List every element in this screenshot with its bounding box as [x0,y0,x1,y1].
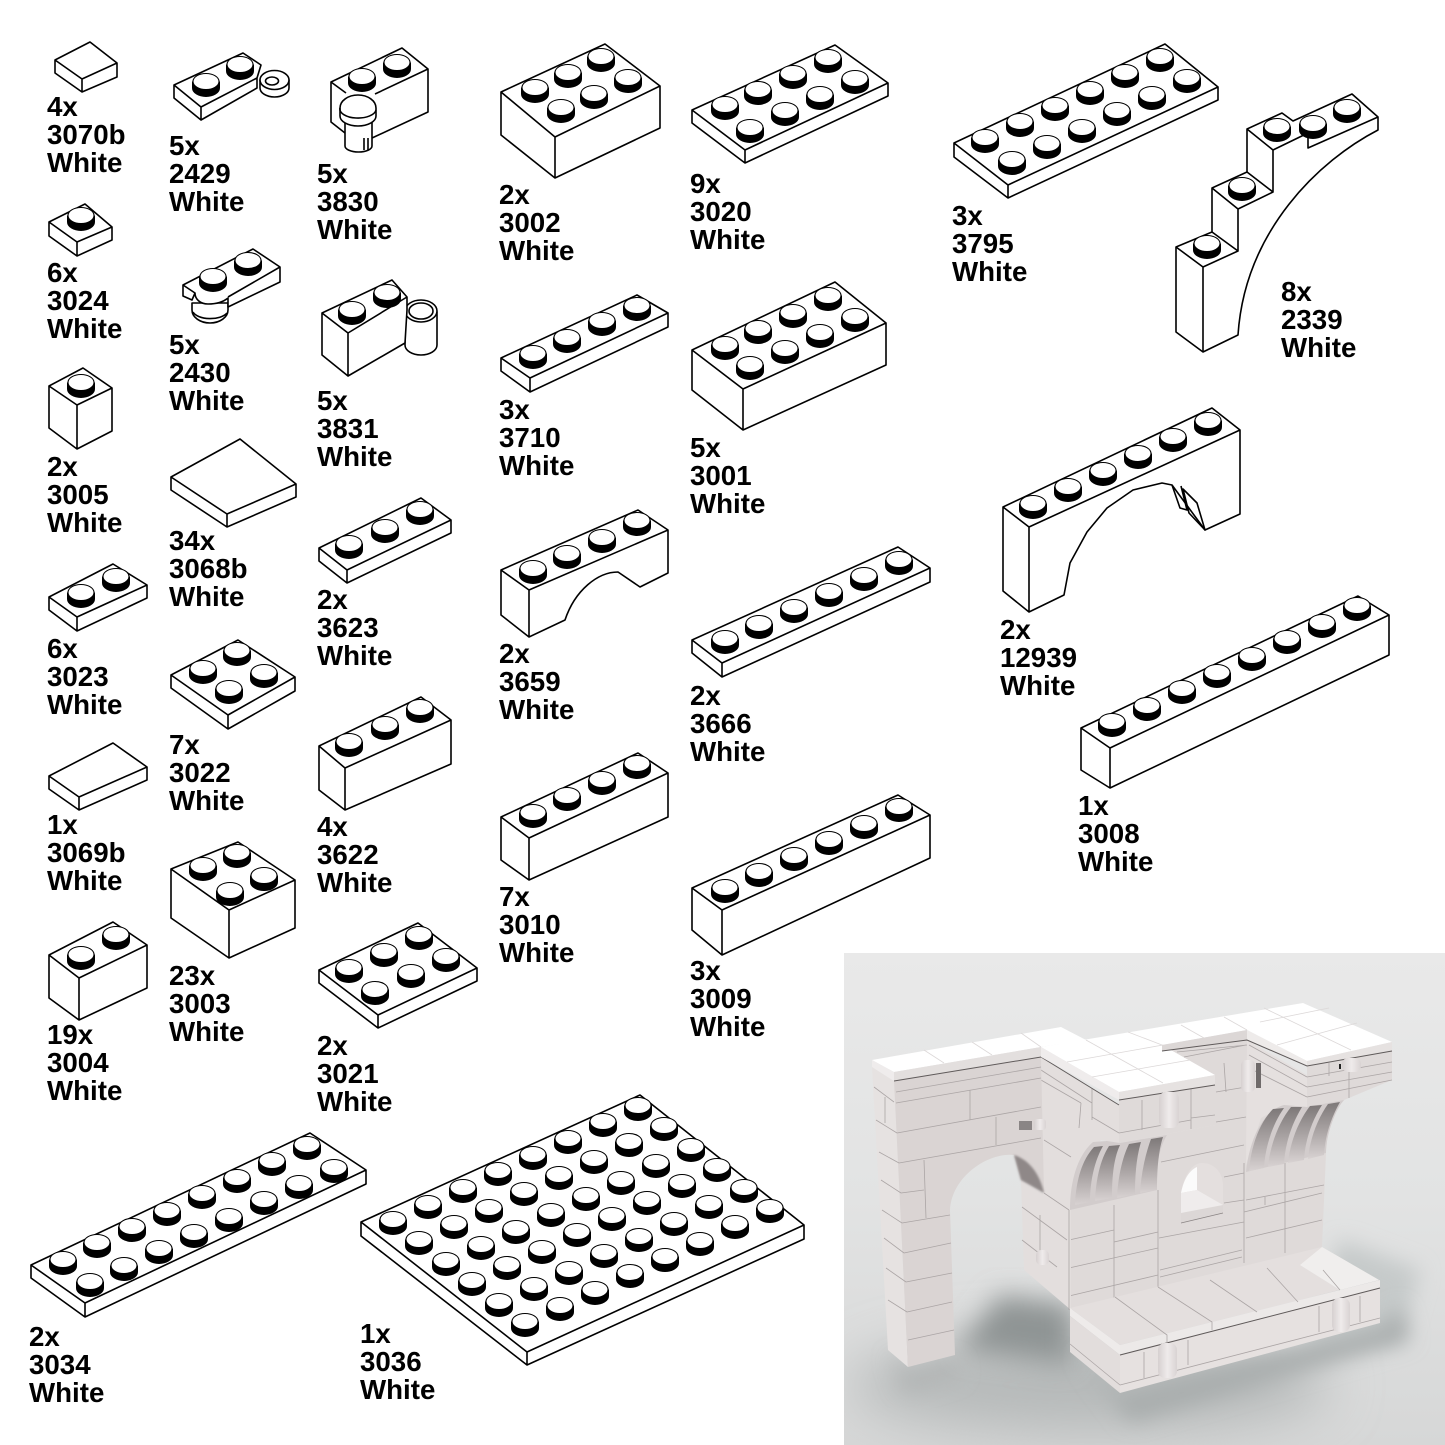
label 3666: 3666 [690,708,752,739]
label 3022: 3022 [169,757,231,788]
label 3024: 6x [47,257,78,288]
label 3795: 3795 [952,228,1014,259]
label 3034: 2x [29,1321,60,1352]
part 3666 [690,547,930,767]
brick 3659 [501,510,668,637]
panel: rendered model photo [844,953,1445,1445]
label 3009: White [690,1011,765,1042]
part 3659 [499,510,668,725]
brick 3002 [501,44,660,178]
part 3024 [47,204,122,344]
brick 3024 [49,204,112,256]
corbel fan right [1246,1100,1344,1172]
label 3068b: 3068b [169,553,248,584]
brick 3010 [501,753,668,880]
brick 3036 [361,1095,804,1365]
part 3831 [317,280,437,472]
part 3005 [47,368,122,538]
label 3069b: 1x [47,809,78,840]
part 2430 [169,249,280,416]
round clips [1019,1058,1361,1378]
part 3009 [690,795,930,1042]
part 3020 [690,45,888,255]
protruding top block [1119,1085,1215,1143]
white roof plates [872,1003,1392,1105]
part 3004 [47,922,147,1106]
brick 3004 [49,922,147,1020]
part 3623 [317,498,451,671]
part 2339 [1176,94,1378,363]
label 3010: 7x [499,881,530,912]
label 3009: 3x [690,955,721,986]
brick 3023 [49,564,147,631]
label 3831: 5x [317,385,348,416]
brick 12939 [1003,408,1240,612]
brick 3021 [319,923,477,1028]
right block [1249,1044,1392,1100]
label 3003: White [169,1016,244,1047]
label 2339: White [1281,332,1356,363]
brick 3622 [319,697,451,810]
part 3010 [499,753,668,968]
label 3659: White [499,694,574,725]
label 3021: 3021 [317,1058,379,1089]
label 3830: 3830 [317,186,379,217]
label 2429: White [169,186,244,217]
label 3666: 2x [690,680,721,711]
label 3830: 5x [317,158,348,189]
label 3002: 2x [499,179,530,210]
label 3623: 2x [317,584,348,615]
label 3036: 1x [360,1318,391,1349]
label 3068b: White [169,581,244,612]
label 3008: 1x [1078,790,1109,821]
part 3036 [360,1095,804,1405]
label 3001: 5x [690,432,721,463]
brick 2339 [1176,94,1378,352]
label 2430: 5x [169,329,200,360]
label 3068b: 34x [169,525,216,556]
part 3622 [317,697,451,898]
floor shadows [850,1240,1420,1433]
brick 3830 [331,48,428,152]
label 3008: White [1078,846,1153,877]
brick 3666 [692,547,930,677]
corbel fan left [1070,1135,1167,1210]
label 3623: White [317,640,392,671]
brick 3070b [55,42,117,92]
label 3710: White [499,450,574,481]
label 3003: 3003 [169,988,231,1019]
back wall [1071,1040,1326,1308]
label 3831: White [317,441,392,472]
label 3830: White [317,214,392,245]
brick 2429 [174,53,289,120]
label 3070b: 4x [47,91,78,122]
label 3004: White [47,1075,122,1106]
label 3005: 3005 [47,479,109,510]
part 3003 [169,842,295,1047]
label 3020: 3020 [690,196,752,227]
label 3024: 3024 [47,285,109,316]
brick 3069b [49,743,147,810]
label 3024: White [47,313,122,344]
brick 3003 [171,842,295,958]
part 3023 [47,564,147,720]
part 3022 [169,640,295,816]
label 3023: White [47,689,122,720]
part 3068b [169,439,296,612]
brick 3022 [171,640,295,729]
label 3666: White [690,736,765,767]
label 3020: 9x [690,168,721,199]
label 2339: 8x [1281,276,1312,307]
label 3070b: White [47,147,122,178]
arch pillar [872,1057,1044,1367]
base slab [1070,1247,1380,1393]
label 3004: 3004 [47,1047,109,1078]
label 3005: White [47,507,122,538]
label 3795: 3x [952,200,983,231]
label 2430: White [169,385,244,416]
label 2339: 2339 [1281,304,1343,335]
label 3010: White [499,937,574,968]
label 3009: 3009 [690,983,752,1014]
label 3001: 3001 [690,460,752,491]
part 12939 [1000,408,1240,701]
brick 3008 [1081,596,1389,788]
label 3001: White [690,488,765,519]
brick 3020 [692,45,888,163]
label 3659: 3659 [499,666,561,697]
label 3659: 2x [499,638,530,669]
part 3830 [317,48,428,245]
label 3623: 3623 [317,612,379,643]
label 3622: 4x [317,811,348,842]
brick 3623 [319,498,451,583]
brick 2430 [183,249,280,323]
label 3069b: White [47,865,122,896]
label 2429: 5x [169,130,200,161]
part 3021 [317,923,477,1117]
label 3021: 2x [317,1030,348,1061]
label 3795: White [952,256,1027,287]
label 3010: 3010 [499,909,561,940]
label 3831: 3831 [317,413,379,444]
part 3795 [952,44,1218,287]
part 3008 [1078,596,1389,877]
part 3070b [47,42,126,178]
window [1181,1163,1223,1223]
label 3034: 3034 [29,1349,91,1380]
label 3022: 7x [169,729,200,760]
label 3020: White [690,224,765,255]
label 3710: 3x [499,394,530,425]
label 3023: 6x [47,633,78,664]
label 3622: 3622 [317,839,379,870]
label 3622: White [317,867,392,898]
label 3070b: 3070b [47,119,126,150]
part 3001 [690,282,886,519]
part 3034 [29,1133,366,1408]
label 3005: 2x [47,451,78,482]
label 12939: White [1000,670,1075,701]
label 3002: White [499,235,574,266]
part 3710 [499,295,668,481]
label 2430: 2430 [169,357,231,388]
label 3036: White [360,1374,435,1405]
label 3002: 3002 [499,207,561,238]
brick 3831 [322,280,437,376]
photo background [844,953,1445,1445]
part 3002 [499,44,660,266]
label 3021: White [317,1086,392,1117]
brick 3068b [171,439,296,527]
label 12939: 2x [1000,614,1031,645]
label 3022: White [169,785,244,816]
label 3004: 19x [47,1019,94,1050]
part 3069b [47,743,147,896]
label 12939: 12939 [1000,642,1077,673]
brick 3710 [501,295,668,392]
label 3008: 3008 [1078,818,1140,849]
label 3036: 3036 [360,1346,422,1377]
brick 3009 [692,795,930,955]
brick 3005 [49,368,112,449]
brick 3795 [954,44,1218,198]
label 3069b: 3069b [47,837,126,868]
label 3034: White [29,1377,104,1408]
label 2429: 2429 [169,158,231,189]
label 3710: 3710 [499,422,561,453]
middle side wall [1021,1057,1119,1310]
part 2429 [169,53,289,217]
brick 3001 [692,282,886,430]
label 3003: 23x [169,960,216,991]
brick 3034 [31,1133,366,1317]
label 3023: 3023 [47,661,109,692]
